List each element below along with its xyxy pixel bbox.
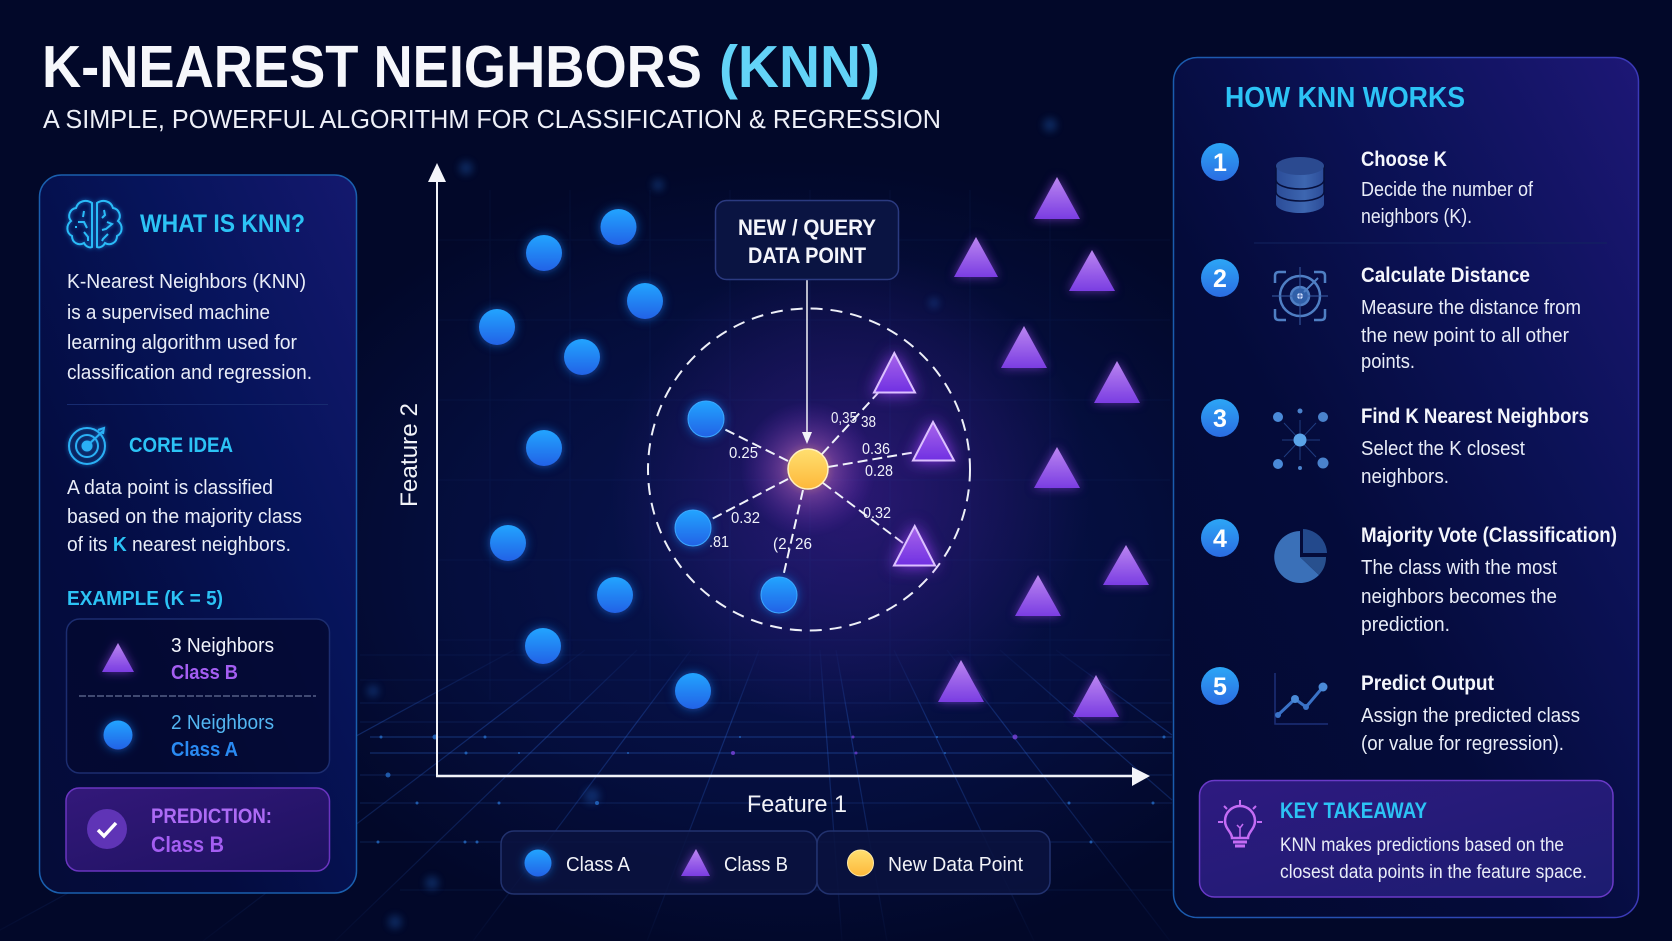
- step 2 text: Measure the distance from: [1361, 297, 1581, 319]
- icon: database: [1276, 157, 1324, 213]
- icon: pie chart: [1274, 529, 1327, 583]
- key takeaway callout: [1200, 780, 1613, 897]
- step 4 text: prediction.: [1361, 614, 1450, 636]
- step 3 text: neighbors.: [1361, 466, 1449, 488]
- step 2 text: Calculate Distance: [1361, 264, 1530, 287]
- class B count: 3 Neighbors: [171, 635, 274, 657]
- query point: [788, 449, 828, 489]
- step 1 text: [1361, 148, 1533, 228]
- step 2: [1201, 259, 1581, 373]
- title: K-NEAREST NEIGHBORS: [42, 34, 702, 100]
- icon: light bulb: [1218, 800, 1262, 846]
- number 1: [1201, 143, 1239, 181]
- core idea text: of its K nearest neighbors.: [67, 534, 291, 556]
- step 5 text: Predict Output: [1361, 672, 1494, 695]
- class A count: Class A: [171, 739, 238, 761]
- neighbors: class A: [675, 401, 797, 613]
- legend: new data point: [848, 850, 1023, 876]
- step 5 text: Assign the predicted class: [1361, 705, 1580, 727]
- distance labels: .81: [709, 534, 729, 551]
- glow: query burst: [740, 401, 876, 537]
- legend: class B: [681, 849, 788, 876]
- step 3: [1201, 399, 1589, 488]
- distance labels: 0.25: [729, 445, 758, 462]
- legend: class A: [524, 850, 631, 876]
- step 4 text: neighbors becomes the: [1361, 586, 1557, 608]
- core idea text: A data point is classified: [67, 477, 273, 499]
- distance labels: 0.32: [731, 510, 760, 527]
- step 4 text: [1361, 524, 1617, 636]
- icon: nearest network: [1273, 408, 1328, 470]
- distance lines: [710, 393, 916, 577]
- step 2 text: the new point to all other: [1361, 325, 1569, 347]
- definition text: K-Nearest Neighbors (KNN): [67, 271, 306, 293]
- distance labels: 0.32: [863, 505, 891, 522]
- step 1 text: Decide the number of: [1361, 179, 1533, 201]
- step 1 text: neighbors (K).: [1361, 206, 1472, 228]
- callout: query point: [716, 200, 898, 444]
- callout: query point: NEW / QUERY: [738, 215, 876, 240]
- step 1: [1201, 143, 1533, 228]
- icon: check: [87, 809, 127, 849]
- number 4: [1201, 519, 1239, 557]
- step 3 text: Select the K closest: [1361, 438, 1525, 460]
- class B count: Class B: [171, 662, 238, 684]
- class B points: [938, 177, 1149, 717]
- heading: what is KNN: WHAT IS KNN?: [140, 210, 305, 238]
- legend: class B: Class B: [724, 854, 788, 876]
- prediction text: [151, 805, 272, 857]
- number 3: 3: [1213, 405, 1227, 433]
- class A count: [171, 712, 274, 761]
- number 2: [1201, 259, 1239, 297]
- definition text: learning algorithm used for: [67, 332, 297, 354]
- neighbors: class B: [874, 353, 954, 566]
- step 5: [1201, 667, 1580, 755]
- icon: target: [69, 428, 105, 464]
- x axis: [436, 767, 1150, 786]
- distance labels: [709, 410, 893, 553]
- core idea text: [67, 477, 302, 556]
- subtitle: A SIMPLE, POWERFUL ALGORITHM FOR CLASSIFICATION & REGRESSION: [43, 104, 941, 134]
- icon: brain: [67, 201, 122, 247]
- step 4 text: The class with the most: [1361, 557, 1557, 579]
- scatter chart: [396, 163, 1150, 818]
- icon: circle class A: [104, 720, 132, 750]
- step 1 text: Choose K: [1361, 148, 1447, 171]
- panel: how KNN works: [1174, 58, 1638, 918]
- legend: [501, 831, 1050, 894]
- y axis: [428, 163, 446, 776]
- heading: how KNN works: HOW KNN WORKS: [1225, 82, 1465, 114]
- core idea text: based on the majority class: [67, 506, 302, 528]
- distance labels: 0,35: [831, 410, 857, 427]
- step 5 text: [1361, 672, 1580, 755]
- step 4 text: Majority Vote (Classification): [1361, 524, 1617, 547]
- distance labels: 0.28: [865, 463, 893, 480]
- icon: distance target: [1272, 267, 1328, 325]
- definition text: [67, 271, 312, 384]
- key takeaway text: closest data points in the feature space.: [1280, 862, 1587, 883]
- heading: core idea: CORE IDEA: [129, 434, 233, 457]
- key takeaway text: KEY TAKEAWAY: [1280, 798, 1427, 823]
- step 4: [1201, 519, 1617, 636]
- number 3: [1201, 399, 1239, 437]
- number 4: 4: [1213, 525, 1227, 553]
- prediction box: [66, 788, 330, 871]
- key takeaway text: [1280, 798, 1587, 883]
- icon: triangle class B: [102, 643, 134, 672]
- class B count: [171, 635, 274, 684]
- number 5: 5: [1213, 673, 1227, 701]
- definition text: is a supervised machine: [67, 302, 270, 324]
- class A points: [479, 209, 711, 709]
- step 2 text: [1361, 264, 1581, 373]
- example box: [66, 619, 330, 773]
- icon: line chart: [1275, 673, 1328, 724]
- prediction text: Class B: [151, 832, 224, 857]
- step 2 text: points.: [1361, 351, 1415, 373]
- prediction text: PREDICTION:: [151, 805, 272, 828]
- legend: new data point: New Data Point: [888, 854, 1023, 876]
- y axis label: Feature 2: [396, 403, 423, 507]
- panel: what is KNN: [40, 175, 356, 893]
- distance labels: (2, 26: [773, 536, 812, 553]
- distance labels: 38: [861, 414, 876, 431]
- definition text: classification and regression.: [67, 362, 312, 384]
- title: (KNN): [719, 34, 880, 100]
- step 5 text: (or value for regression).: [1361, 733, 1564, 755]
- number 2: 2: [1213, 265, 1227, 293]
- callout: query point: DATA POINT: [748, 243, 867, 268]
- key takeaway text: KNN makes predictions based on the: [1280, 835, 1564, 856]
- class A count: 2 Neighbors: [171, 712, 274, 734]
- step 3 text: [1361, 405, 1589, 488]
- step 3 text: Find K Nearest Neighbors: [1361, 405, 1589, 428]
- number 1: 1: [1213, 149, 1227, 177]
- legend: class A: Class A: [566, 854, 631, 876]
- K neighborhood circle: [648, 308, 970, 630]
- number 5: [1201, 667, 1239, 705]
- x axis label: Feature 1: [747, 791, 847, 818]
- heading: example: EXAMPLE (K = 5): [67, 588, 223, 610]
- distance labels: 0.36: [862, 441, 890, 458]
